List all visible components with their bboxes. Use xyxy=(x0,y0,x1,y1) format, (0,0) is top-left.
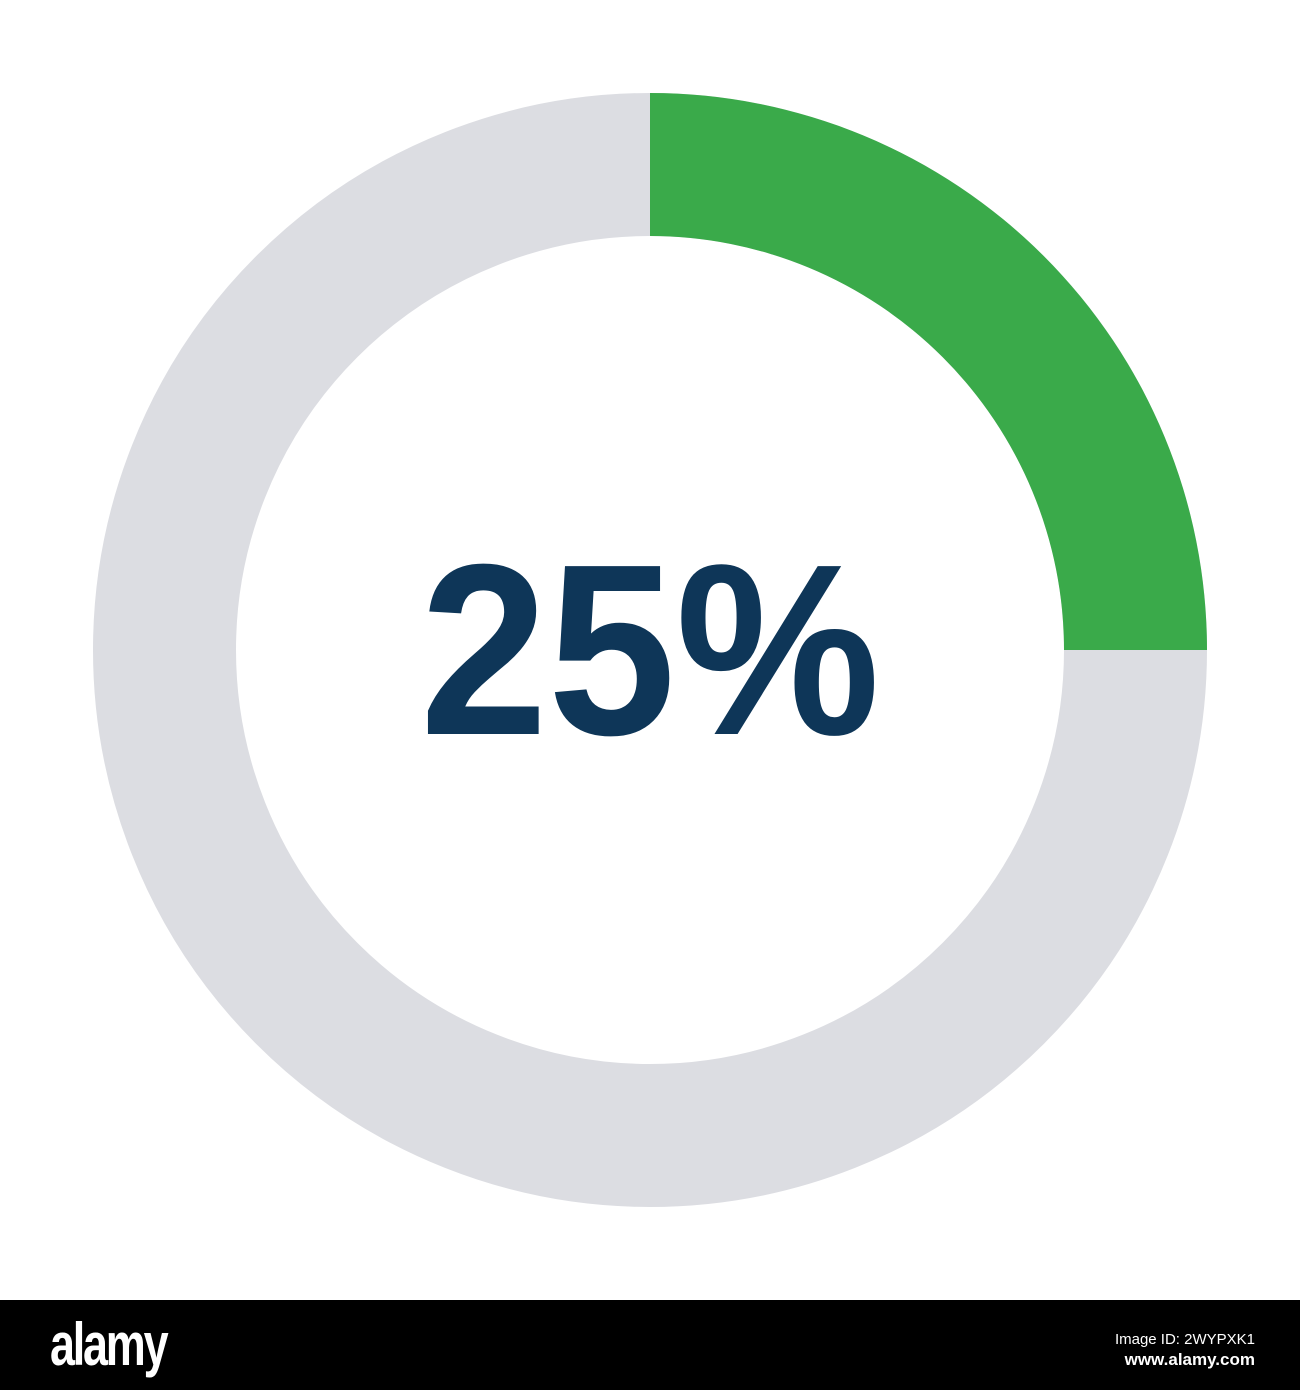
footer bar xyxy=(0,1300,1300,1390)
logo: alamy xyxy=(50,1311,166,1378)
green segment 25% xyxy=(650,93,1207,650)
percentage label: 25% xyxy=(420,513,880,786)
image id: Image ID: 2WYPXK1 xyxy=(1115,1331,1255,1348)
image id: www.alamy.com xyxy=(1125,1350,1255,1369)
ring track xyxy=(164,164,1136,1136)
image id xyxy=(1115,1331,1255,1369)
